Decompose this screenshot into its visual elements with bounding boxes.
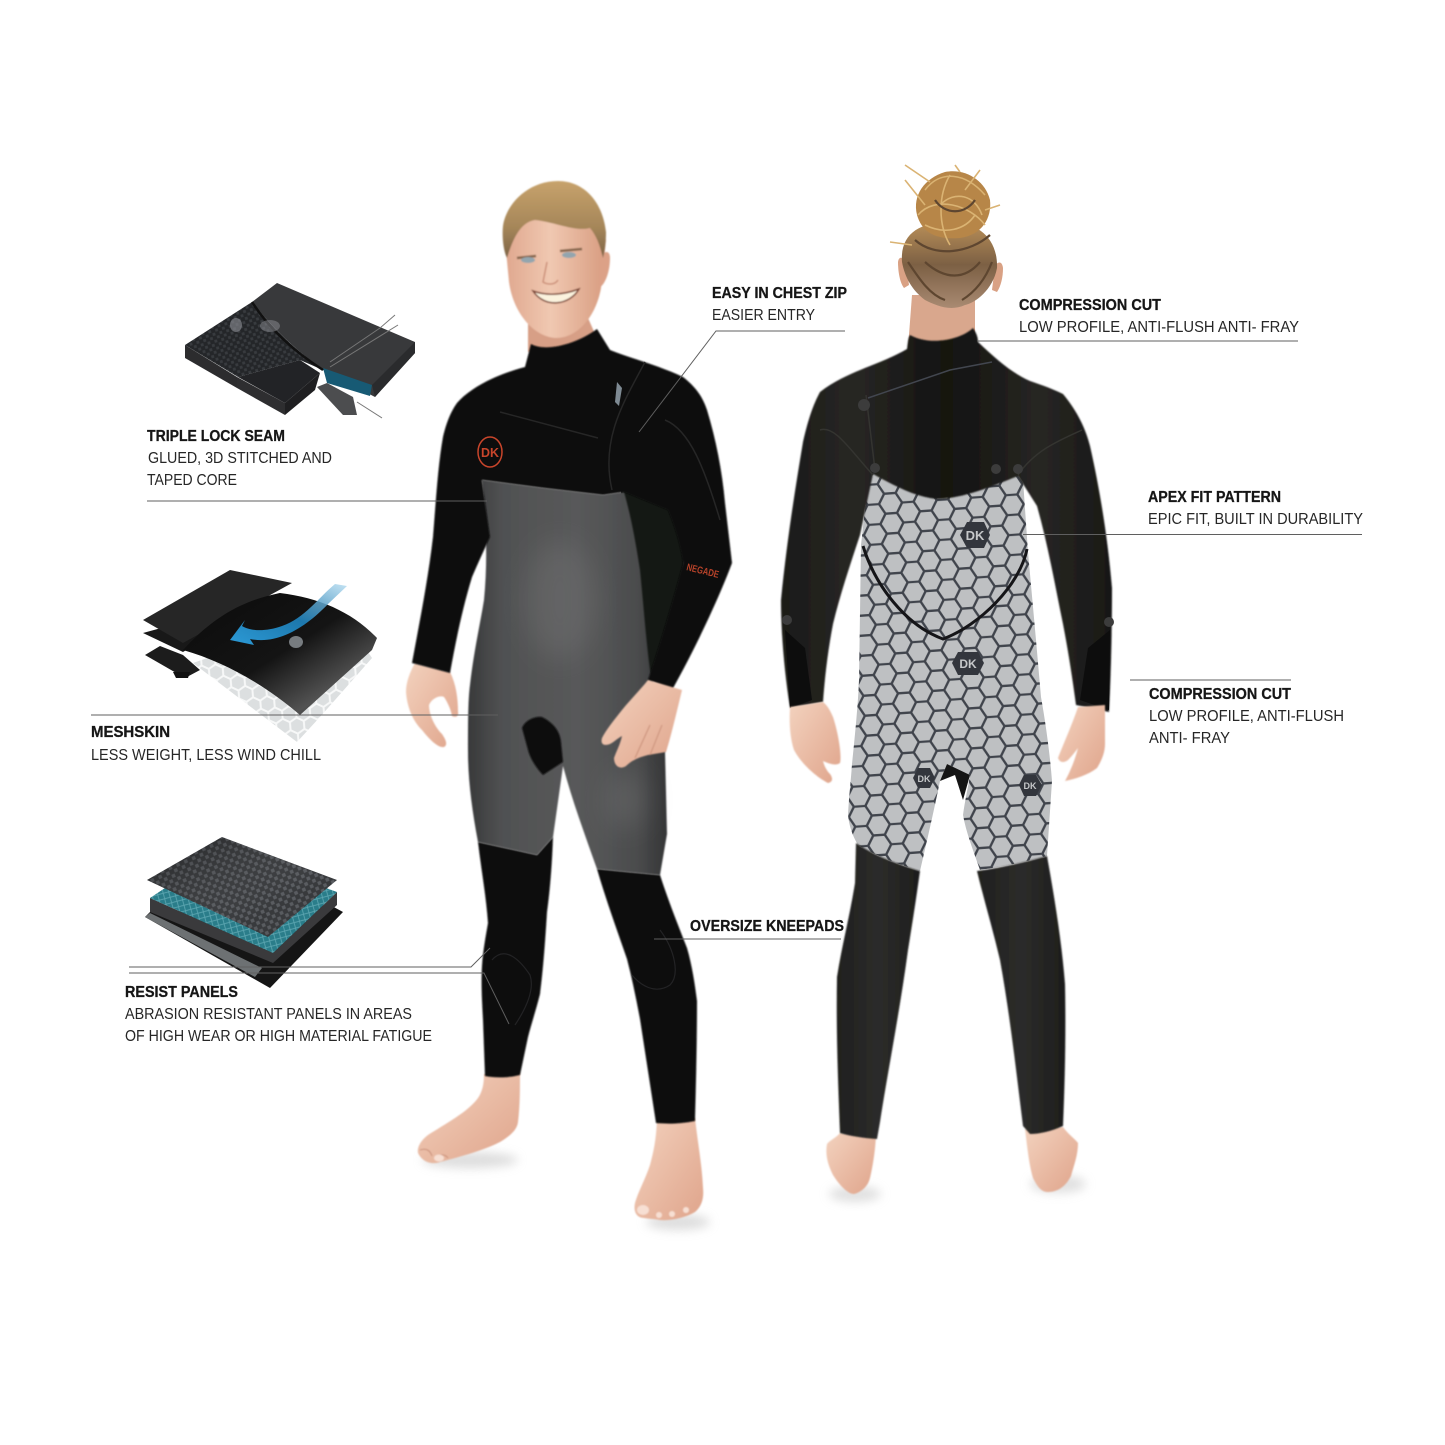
foot shadows xyxy=(422,1152,710,1230)
figure: front view model in wetsuit xyxy=(406,181,732,1230)
dark body side behind right arm xyxy=(620,480,690,680)
label: meshskin: LESS WEIGHT, LESS WIND CHILL xyxy=(91,747,321,764)
back logo hexagons: DK xyxy=(1024,781,1037,791)
label: easy in chest zip xyxy=(712,285,847,324)
back zip seam xyxy=(868,362,992,398)
grey torso and thighs xyxy=(468,480,667,875)
foot shadows xyxy=(829,1175,1086,1202)
shield outline xyxy=(863,546,1027,639)
label: oversize kneepads: OVERSIZE KNEEPADS xyxy=(690,918,844,935)
crotch xyxy=(940,764,970,800)
label: compression cut lower: LOW PROFILE, ANTI-FLUSH xyxy=(1149,708,1344,725)
left leg xyxy=(478,837,553,1077)
left foot xyxy=(418,1072,520,1163)
label: meshskin: MESHSKIN xyxy=(91,724,170,741)
left hand xyxy=(406,663,458,747)
back logo hexagons xyxy=(913,522,1042,796)
chest logo: DK xyxy=(481,445,500,460)
label: compression cut lower: ANTI- FRAY xyxy=(1149,730,1230,747)
label: triple lock seam: TRIPLE LOCK SEAM xyxy=(147,428,285,445)
label: compression cut lower: COMPRESSION CUT xyxy=(1149,686,1291,703)
label: meshskin xyxy=(91,724,321,764)
swatch: triple lock seam material xyxy=(185,283,415,418)
knee seams xyxy=(492,930,675,1025)
honeycomb panel xyxy=(848,474,1052,871)
back right foot xyxy=(1025,1127,1078,1192)
back logo hexagons: DK xyxy=(959,657,977,671)
label: compression cut top: LOW PROFILE, ANTI-FLUSH ANTI- FRAY xyxy=(1019,319,1299,336)
label: resist panels xyxy=(125,984,432,1045)
crotch panel xyxy=(522,717,563,775)
back right hand xyxy=(1058,705,1105,781)
label: easy in chest zip: EASY IN CHEST ZIP xyxy=(712,285,847,302)
label: triple lock seam: TAPED CORE xyxy=(147,472,237,489)
sleeve print: NEGADE xyxy=(685,562,720,581)
label: apex fit pattern: EPIC FIT, BUILT IN DURABILITY xyxy=(1148,511,1363,528)
label: resist panels: ABRASION RESISTANT PANELS IN AREAS xyxy=(125,1006,412,1023)
chest zip and seams xyxy=(500,362,720,520)
right leg xyxy=(597,869,697,1124)
back left leg xyxy=(837,843,920,1139)
back logo hexagons: DK xyxy=(918,774,931,784)
neck and ears xyxy=(908,295,975,348)
back logo hexagons: DK xyxy=(966,528,985,543)
swatch: resist panels material xyxy=(145,837,343,988)
seam dots xyxy=(782,399,1114,627)
upper black neoprene with sleeves xyxy=(412,329,732,690)
right foot xyxy=(634,1118,703,1220)
back left foot xyxy=(826,1133,876,1194)
hair xyxy=(890,165,1000,308)
label: triple lock seam xyxy=(147,428,332,489)
label: compression cut top xyxy=(1019,297,1299,336)
label: apex fit pattern xyxy=(1148,489,1363,528)
label: apex fit pattern: APEX FIT PATTERN xyxy=(1148,489,1281,506)
label: easy in chest zip: EASIER ENTRY xyxy=(712,307,815,324)
zip pull xyxy=(615,382,622,406)
back suit upper black xyxy=(781,328,1112,712)
back left hand xyxy=(790,702,841,783)
chest logo xyxy=(478,437,502,467)
leader lines xyxy=(91,331,1362,1024)
label: resist panels: RESIST PANELS xyxy=(125,984,238,1001)
head xyxy=(503,181,610,352)
label: triple lock seam: GLUED, 3D STITCHED AND xyxy=(148,450,332,467)
figure: back view model in wetsuit xyxy=(781,165,1114,1202)
elbow panels xyxy=(785,630,812,708)
back right leg xyxy=(977,856,1065,1134)
swatch: meshskin material xyxy=(143,570,377,742)
label: compression cut lower xyxy=(1149,686,1344,747)
label: compression cut top: COMPRESSION CUT xyxy=(1019,297,1161,314)
suit highlights xyxy=(525,540,645,830)
label: resist panels: OF HIGH WEAR OR HIGH MATERIAL FATIGUE xyxy=(125,1028,432,1045)
right hand xyxy=(602,680,682,768)
